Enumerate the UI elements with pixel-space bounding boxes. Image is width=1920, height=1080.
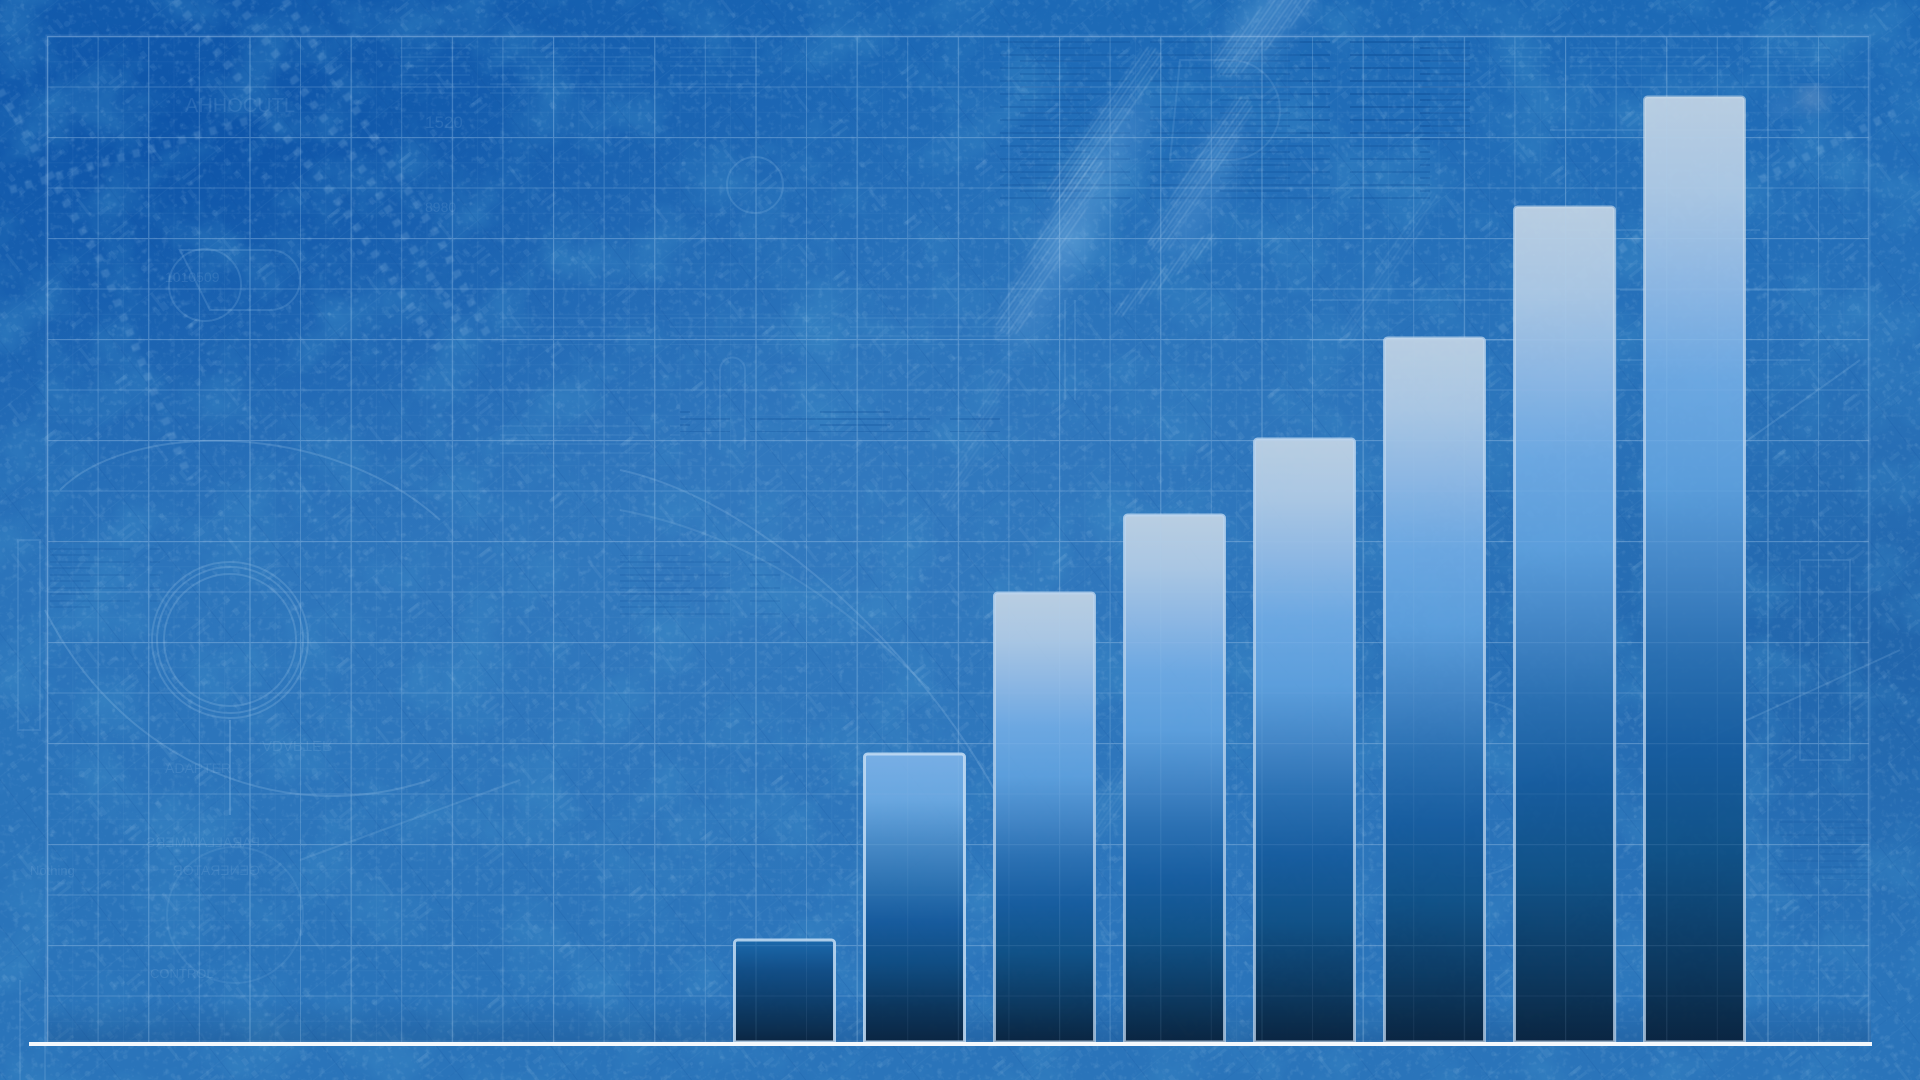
row bundles of drafted text lines: [50, 40, 1870, 880]
blueprint background texture: 8980: [425, 199, 456, 215]
blueprint background texture: PARALLAMMERS: [146, 834, 260, 850]
blueprint background texture: GENERATOR: [173, 862, 260, 878]
bar 7: [1514, 207, 1614, 1042]
faint drafted circle and arcs: [45, 441, 1559, 983]
blueprint background texture: Nothing: [30, 863, 75, 878]
soft hatched streaks top right: [1020, 0, 1295, 330]
bar 6: [1384, 338, 1484, 1042]
blueprint background texture: ADAPTER: [165, 760, 231, 776]
blueprint background texture: 1010509: [165, 269, 220, 285]
bar 5: [1254, 439, 1354, 1042]
bar chart: [733, 96, 1746, 1042]
bar 3: [994, 593, 1094, 1042]
blueprint background texture: 1520: [425, 113, 463, 132]
baseline axis: [29, 1042, 1872, 1046]
bar 4: [1124, 515, 1224, 1042]
bar 2: [864, 754, 964, 1042]
blueprint background texture: ADAPTER: [262, 737, 333, 754]
bar 8: [1644, 97, 1744, 1042]
bar 1: [734, 940, 834, 1042]
blueprint background texture: AHHOCUTL: [185, 95, 295, 117]
blueprint background texture: CONTROL: [150, 966, 214, 981]
